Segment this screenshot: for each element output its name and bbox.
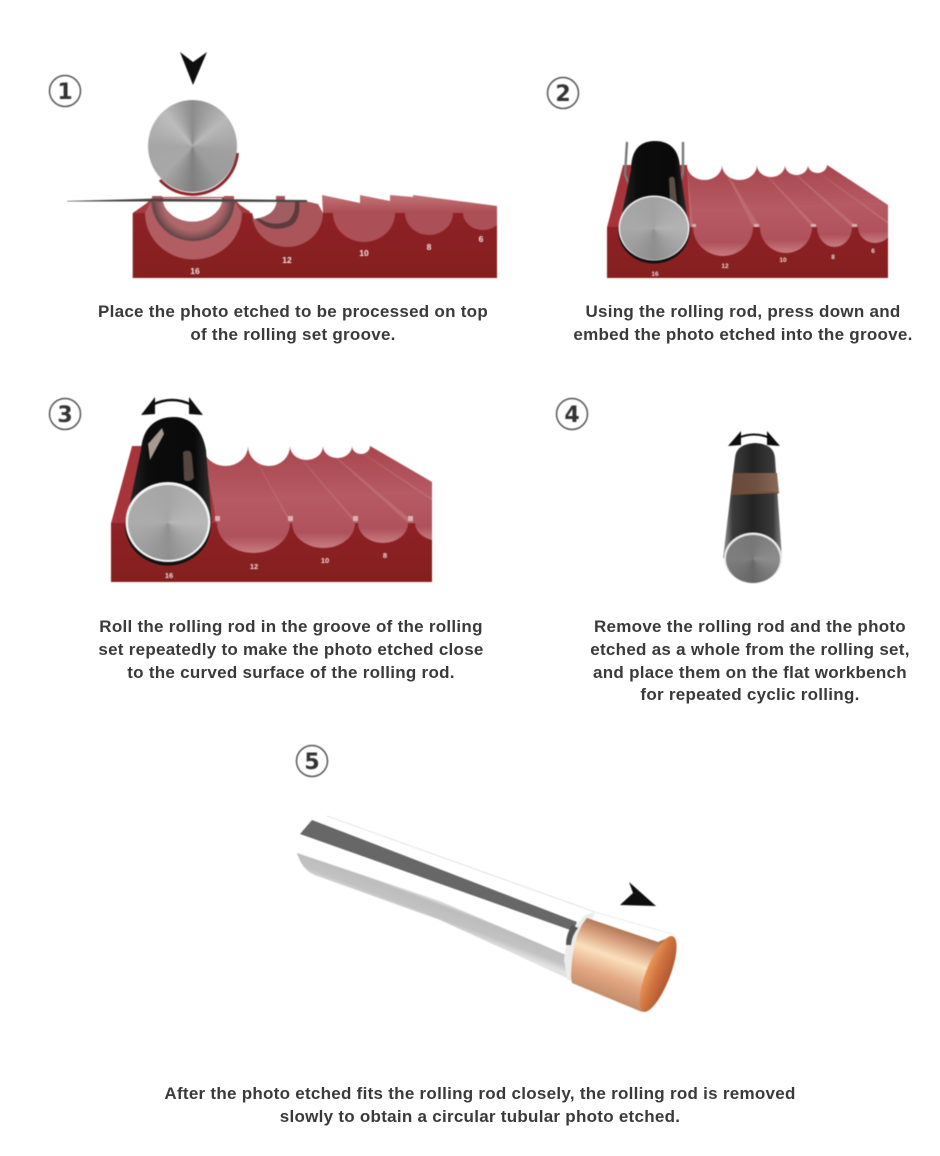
arrow: press down (180, 52, 207, 85)
caption: step 3: set repeatedly to make the photo etched close (98, 640, 484, 659)
caption: step 2: embed the photo etched into the groove. (573, 325, 913, 344)
rolling set block (110, 445, 433, 583)
panel: step 2 illustration (606, 140, 889, 279)
caption: step 1: of the rolling set groove. (190, 325, 396, 344)
back edge cut-outs (687, 150, 827, 180)
rod body (723, 443, 782, 558)
rolling rod body (126, 417, 212, 522)
groove size labels: 8 (427, 242, 432, 252)
groove size labels: 6 (479, 234, 484, 244)
caption: step 1 (98, 302, 488, 344)
groove size labels: 16 (165, 571, 173, 580)
etched sheet wings (625, 142, 683, 190)
caption: step 4 (590, 617, 910, 704)
arrow: cyclic rolling (728, 431, 780, 446)
panel: step 1 illustration (67, 52, 509, 285)
rolling set block (133, 197, 497, 278)
rolling rod end (148, 100, 237, 192)
groove size labels: 10 (321, 556, 329, 565)
caption: step 5: slowly to obtain a circular tubular photo etched. (280, 1107, 680, 1126)
caption: step 5: After the photo etched fits the rolling rod closely, the rolling rod is removed (164, 1084, 796, 1103)
groove size labels: 12 (282, 255, 292, 265)
groove size labels: 8 (831, 254, 835, 261)
badge 1 (50, 76, 80, 106)
rolling rod body (619, 141, 689, 228)
rolling rod end (125, 484, 211, 566)
caption: step 4: Remove the rolling rod and the photo (594, 617, 906, 636)
caption: step 2 (573, 302, 913, 344)
badge 4: 4 (564, 403, 580, 428)
badge 1: 1 (57, 80, 73, 105)
groove size labels: 12 (250, 562, 258, 571)
arrow: remove direction (620, 882, 656, 906)
silver rolling rod (297, 816, 595, 979)
back edge cut-outs (203, 430, 370, 466)
badge 4 (556, 398, 588, 430)
arrow: roll back and forth (141, 397, 203, 415)
back grooves of rolling set (322, 195, 497, 213)
groove size labels (651, 248, 875, 278)
groove size labels: 16 (651, 271, 659, 278)
rolling rod end (618, 196, 690, 264)
rod end (724, 532, 782, 584)
caption: step 5 (164, 1084, 796, 1126)
panel: step 5 illustration (297, 816, 684, 1016)
caption: step 3 (98, 617, 484, 682)
groove size labels: 12 (721, 263, 729, 270)
caption: step 3: to the curved surface of the rolling rod. (127, 663, 455, 682)
caption: step 4: for repeated cyclic rolling. (640, 685, 860, 704)
badge 5: 5 (304, 750, 320, 775)
groove size labels: 10 (359, 248, 369, 258)
etched sheet under rod (160, 153, 238, 194)
grooves (206, 446, 432, 554)
groove 12 (243, 196, 323, 247)
photo etched sheet (67, 198, 307, 202)
badge 3 (50, 398, 80, 430)
groove size labels: 6 (871, 248, 875, 255)
groove size labels: 16 (190, 266, 200, 276)
grooves 10, 8, 6 (333, 213, 503, 242)
badge 3: 3 (57, 403, 73, 428)
rolling set block (606, 164, 889, 279)
copper tube (564, 912, 684, 1016)
badge 2 (548, 78, 578, 108)
caption: step 1: Place the photo etched to be processed on top (98, 302, 488, 321)
badge 2: 2 (555, 82, 571, 107)
etched band (731, 473, 779, 495)
panel: step 4 illustration (723, 431, 782, 584)
caption: step 3: Roll the rolling rod in the groove of the rolling (99, 617, 483, 636)
step number badges (50, 76, 588, 776)
groove size labels (190, 234, 484, 276)
grooves (687, 165, 888, 256)
caption: step 4: and place them on the flat workbench (593, 663, 907, 682)
badge 5 (296, 746, 328, 776)
groove size labels: 10 (779, 257, 787, 264)
caption: step 2: Using the rolling rod, press down and (585, 302, 901, 321)
groove size labels: 8 (383, 551, 387, 560)
caption: step 4: etched as a whole from the rolling set, (590, 640, 910, 659)
panel: step 3 illustration (110, 396, 433, 583)
groove 16 (145, 196, 242, 259)
groove size labels (165, 551, 387, 580)
